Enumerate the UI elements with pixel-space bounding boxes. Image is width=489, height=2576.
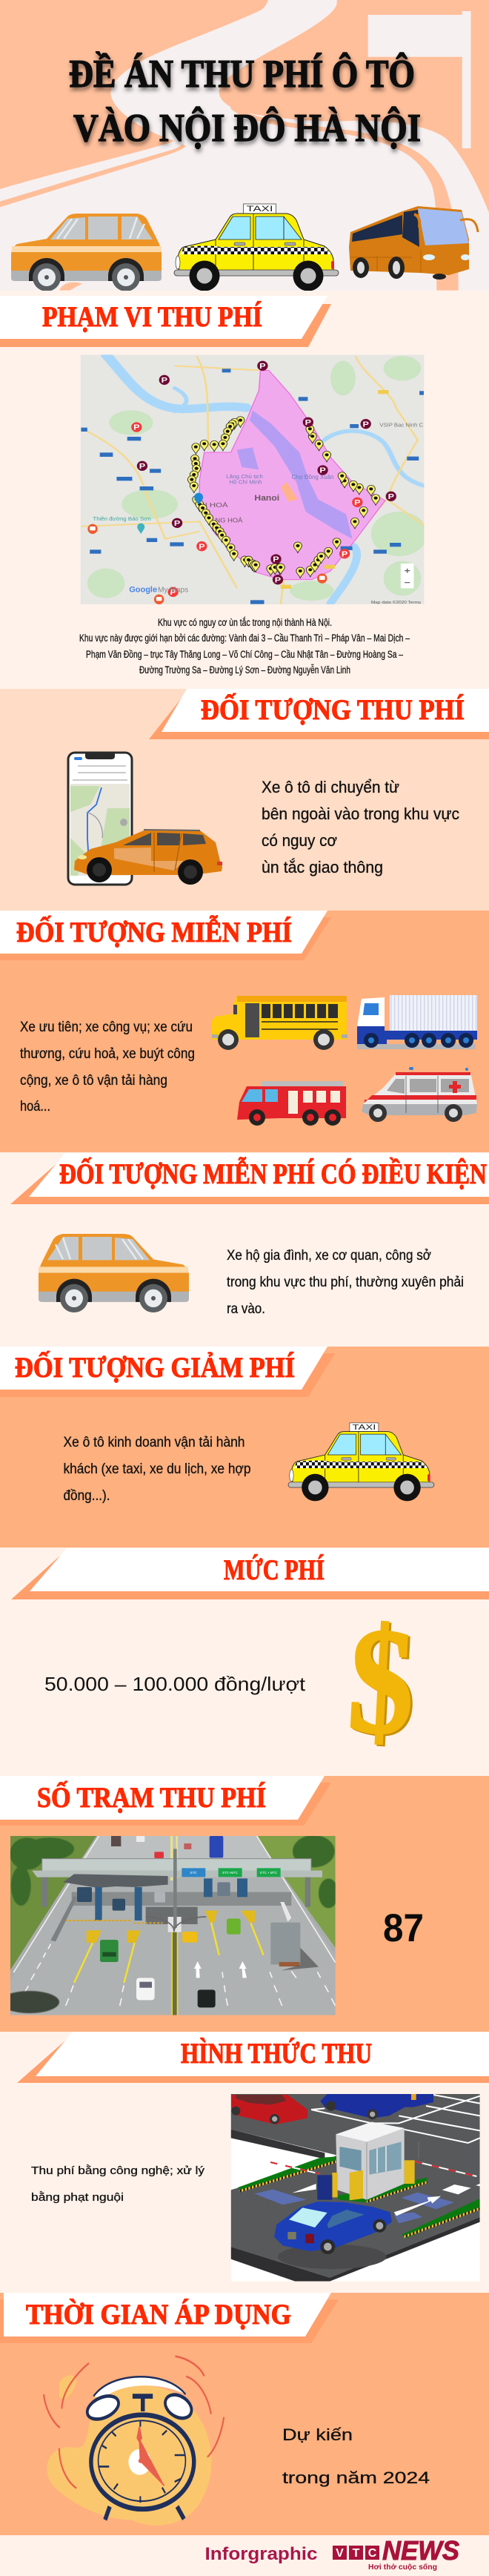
blue car entering xyxy=(274,2202,392,2254)
text: đối tượng giảm phí: khách (xe taxi, xe du lịch, xe hợp xyxy=(64,1461,251,1477)
toll road vehicles xyxy=(77,1836,319,2007)
heading: phạm vi thu phí xyxy=(0,296,331,347)
text: đối tượng miễn phí: thương, cứu hoả, xe buýt công xyxy=(20,1046,195,1062)
panel: footer xyxy=(0,2535,489,2576)
illustration: parking toll booth xyxy=(231,2094,480,2282)
panel: hình thức thu xyxy=(0,2032,489,2293)
heading: đối tượng giảm phí: ĐỐI TƯỢNG GIẢM PHÍ xyxy=(15,1350,295,1384)
icon: dollar sign: $ xyxy=(345,1596,419,1767)
icon: orange car xyxy=(11,214,162,291)
panel: đối tượng thu phí xyxy=(0,689,489,911)
heading: thời gian áp dụng: THỜI GIAN ÁP DỤNG xyxy=(26,2298,291,2331)
red car xyxy=(231,2095,307,2124)
text: miễn phí có điều kiện: trong khu vực thu phí, thường xuyên phải xyxy=(227,1275,464,1290)
text: miễn phí có điều kiện: Xe hộ gia đình, xe cơ quan, công sở xyxy=(227,1248,431,1264)
fee amount: 50.000 – 100.000 đồng/lượt xyxy=(44,1673,306,1695)
heading: đối tượng miễn phí: ĐỐI TƯỢNG MIỄN PHÍ xyxy=(16,914,292,948)
map parking markers: P xyxy=(170,589,176,597)
icon: ambulance xyxy=(362,1067,477,1122)
toll gantry: ETC xyxy=(190,1871,197,1875)
heading: mức phí xyxy=(11,1548,489,1599)
heading: hình thức thu: HÌNH THỨC THU xyxy=(181,2037,372,2070)
booth xyxy=(336,2122,405,2200)
map parking markers: P xyxy=(354,499,361,507)
title: ĐỀ ÁN THU PHÍ Ô TÔ xyxy=(69,51,415,96)
map parking markers: P xyxy=(388,493,394,501)
heading: đối tượng miễn phí xyxy=(0,911,331,960)
heading: thời gian áp dụng xyxy=(0,2293,339,2343)
map: Hanoi toll zone: Thiên đường Bảo Sơn xyxy=(93,515,151,522)
heading: phạm vi thu phí: PHẠM VI THU PHÍ xyxy=(42,300,262,333)
toll gantry xyxy=(32,1849,322,1928)
heading: số trạm thu phí: SỐ TRẠM THU PHÍ xyxy=(37,1780,266,1814)
map: Hanoi toll zone: − xyxy=(404,578,410,587)
map parking markers: P xyxy=(319,467,326,475)
map parking markers: P xyxy=(259,363,266,371)
map pins xyxy=(187,417,380,578)
panel: số trạm thu phí xyxy=(0,1776,489,2032)
text: đối tượng miễn phí xyxy=(20,1019,195,1114)
text: đối tượng giảm phí xyxy=(64,1434,251,1504)
heading: số trạm thu phí xyxy=(0,1776,331,1826)
logo: VTC News: NEWS xyxy=(382,2535,459,2566)
icon: alarm clock xyxy=(44,2357,224,2526)
panel: đối tượng miễn phí có điều kiện xyxy=(0,1152,489,1347)
heading: đối tượng giảm phí xyxy=(0,1347,335,1397)
blue parked cars xyxy=(320,2094,433,2119)
panel: mức phí xyxy=(0,1548,489,1776)
map: Hanoi toll zone: Lăng Chủ tịch xyxy=(226,473,263,480)
text: đối tượng giảm phí: Xe ô tô kinh doanh vận tải hành xyxy=(64,1434,245,1450)
icon: box truck xyxy=(357,995,477,1049)
icon: orange car xyxy=(39,1234,189,1312)
map: Hanoi toll zone: My Maps xyxy=(158,587,188,594)
panel: thời gian áp dụng xyxy=(0,2293,489,2535)
heading: đối tượng thu phí xyxy=(149,689,489,739)
text: hình thức thu: bằng phạt nguội xyxy=(31,2191,124,2204)
map: Hanoi toll zone: Google xyxy=(129,584,157,594)
icon: phone with route map xyxy=(68,753,132,885)
map: Hanoi toll zone xyxy=(81,354,428,605)
map: Hanoi toll zone: N HOÀ xyxy=(201,502,229,509)
map parking markers: P xyxy=(199,543,205,551)
heading: hình thức thu xyxy=(17,2032,489,2083)
title xyxy=(69,51,421,150)
text: thời gian áp dụng xyxy=(282,2425,430,2487)
map parking markers: P xyxy=(133,424,140,432)
icon: taxi: TAXI xyxy=(352,1424,376,1432)
map caption xyxy=(79,617,410,676)
photo: toll station illustration xyxy=(0,1835,339,2015)
text: miễn phí có điều kiện: ra vào. xyxy=(227,1301,265,1317)
text: miễn phí có điều kiện xyxy=(227,1248,464,1317)
panel: phạm vi thu phí xyxy=(0,291,424,676)
text: đối tượng thu phí: có nguy cơ xyxy=(262,831,337,850)
map parking markers: P xyxy=(174,520,181,528)
text: đối tượng thu phí xyxy=(262,778,459,876)
map parking markers: P xyxy=(162,377,167,385)
text: đối tượng miễn phí: hoá... xyxy=(20,1098,50,1114)
text: đối tượng miễn phí: cộng, xe ô tô vận tải hàng xyxy=(20,1072,167,1089)
map caption: Đường Trường Sa – Đường Lý Sơn – Đường Nguyễn Văn Linh xyxy=(139,664,350,676)
map parking markers xyxy=(131,361,396,597)
text: hình thức thu xyxy=(31,2164,205,2204)
map parking markers: P xyxy=(273,556,279,564)
heading: miễn phí có điều kiện xyxy=(10,1153,489,1204)
icon: fire truck xyxy=(237,1081,346,1126)
map: Hanoi toll zone: VSIP Bac Ninh C xyxy=(379,421,423,428)
road background artwork xyxy=(0,0,489,291)
icon: taxi: TAXI xyxy=(246,205,273,214)
icon: school bus xyxy=(212,996,347,1050)
text: đối tượng thu phí: Xe ô tô di chuyển từ xyxy=(262,778,399,796)
icon: coach bus xyxy=(349,206,478,280)
text: đối tượng giảm phí: đồng...). xyxy=(64,1487,110,1504)
map: Hanoi toll zone: Hồ Chí Minh xyxy=(229,478,262,485)
heading: mức phí: MỨC PHÍ xyxy=(224,1553,325,1586)
map: Hanoi toll zone: + xyxy=(404,566,410,575)
map parking markers: P xyxy=(139,463,146,471)
text: đối tượng thu phí: bên ngoài vào trong khu vực xyxy=(262,805,459,823)
text: đối tượng thu phí: ùn tắc giao thông xyxy=(262,858,383,876)
icon: taxi xyxy=(288,1423,434,1501)
green kerbs xyxy=(238,2156,480,2238)
panel: đối tượng giảm phí xyxy=(0,1347,489,1548)
text: đối tượng miễn phí: Xe ưu tiên; xe công vụ; xe cứu xyxy=(20,1019,193,1035)
logo: VTC News: T xyxy=(353,2547,360,2560)
toll gantry: ETC+MTC xyxy=(222,1871,238,1875)
panel: hero header xyxy=(0,0,489,291)
logo: VTC News xyxy=(333,2535,459,2572)
logo: VTC News: V xyxy=(336,2547,344,2560)
logo: VTC News: C xyxy=(368,2547,377,2560)
map parking markers: P xyxy=(305,419,311,427)
number of toll stations: 87 xyxy=(383,1906,424,1950)
title: VÀO NỘI ĐÔ HÀ NỘI xyxy=(73,107,421,150)
icon: taxi xyxy=(174,204,339,291)
text: thời gian áp dụng: Dự kiến xyxy=(282,2425,353,2444)
map: Hanoi toll zone: NG HOÀ xyxy=(215,518,243,524)
map parking markers: P xyxy=(362,420,369,429)
icon: dollar sign: $ xyxy=(347,1597,421,1768)
map caption: Khu vực có nguy cơ ùn tắc trong nội thành Hà Nội. xyxy=(158,617,332,628)
text: hình thức thu: Thu phí bằng công nghệ; xử lý xyxy=(31,2164,205,2177)
map: Hanoi toll zone: Hanoi xyxy=(254,492,279,503)
logo: VTC News: Hơi thở cuộc sống xyxy=(368,2563,437,2572)
map parking markers: P xyxy=(275,576,282,584)
icon: orange station wagon xyxy=(74,830,222,885)
map: Hanoi toll zone: Map data ©2020 Terms xyxy=(371,601,421,605)
text: thời gian áp dụng: trong năm 2024 xyxy=(282,2468,430,2487)
panel: đối tượng miễn phí xyxy=(0,911,489,1152)
credit label: Inforgraphic xyxy=(204,2544,317,2564)
map: Hanoi toll zone: Chợ Đồng Xuân xyxy=(292,474,333,480)
map parking markers: P xyxy=(342,550,348,558)
toll gantry: ETC + MTC xyxy=(260,1871,277,1875)
